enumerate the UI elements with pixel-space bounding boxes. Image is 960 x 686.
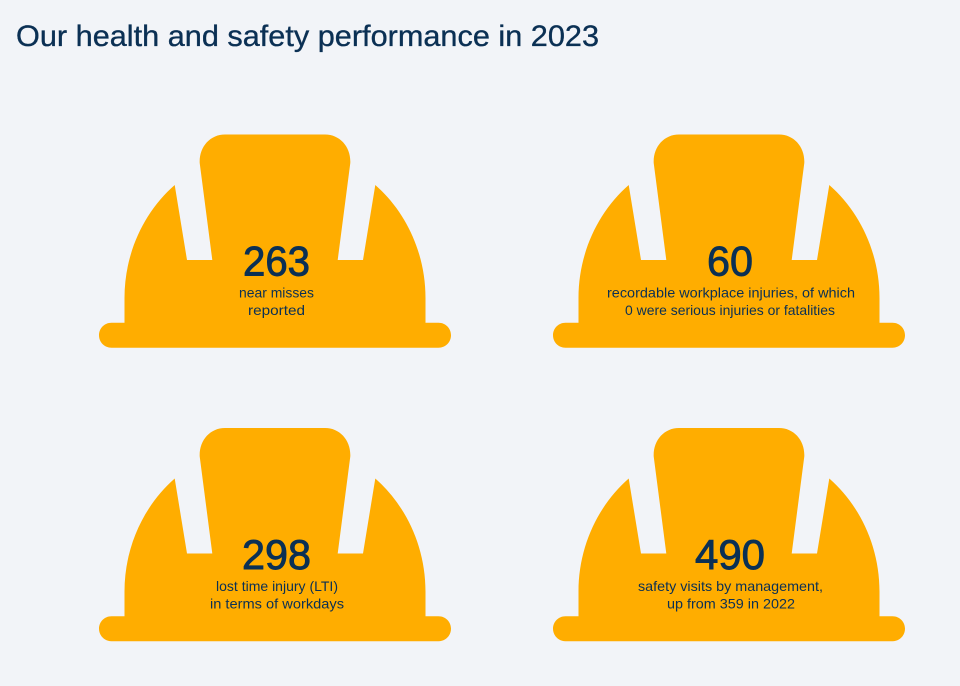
number: 60: 60 — [707, 238, 753, 284]
label: safety visits by management: safety visits by management, — [638, 578, 823, 594]
label: recordable workplace injuries — [607, 285, 855, 318]
label: safety visits by management: up from 359 in 2022 — [667, 596, 795, 612]
panel: recordable injuries helmet — [553, 134, 905, 348]
label: lost time injury in workdays: in terms of workdays — [210, 596, 344, 612]
number: 263: 263 — [243, 238, 310, 284]
number: 298: 298 — [242, 531, 311, 578]
icon: hard hat — [553, 428, 905, 641]
icon: hard hat — [99, 134, 451, 348]
panel: near misses helmet — [99, 134, 451, 348]
icon: hard hat — [553, 134, 905, 348]
panel: lost time injury helmet — [99, 428, 451, 641]
label: safety visits by management — [638, 578, 823, 612]
label: lost time injury in workdays — [210, 578, 344, 612]
label: near misses reported: reported — [248, 302, 305, 318]
panel: safety visits helmet — [553, 428, 905, 641]
label: near misses reported: near misses — [239, 285, 314, 301]
number: 490: 490 — [695, 531, 765, 578]
icon: hard hat — [99, 428, 451, 641]
label: recordable workplace injuries: 0 were serious injuries or fatalities — [625, 302, 835, 318]
label: near misses reported — [239, 285, 314, 318]
label: recordable workplace injuries: recordable workplace injuries, of which — [607, 285, 855, 301]
title: Our health and safety performance in 2023 — [16, 20, 599, 53]
label: lost time injury in workdays: lost time injury (LTI) — [216, 578, 338, 594]
